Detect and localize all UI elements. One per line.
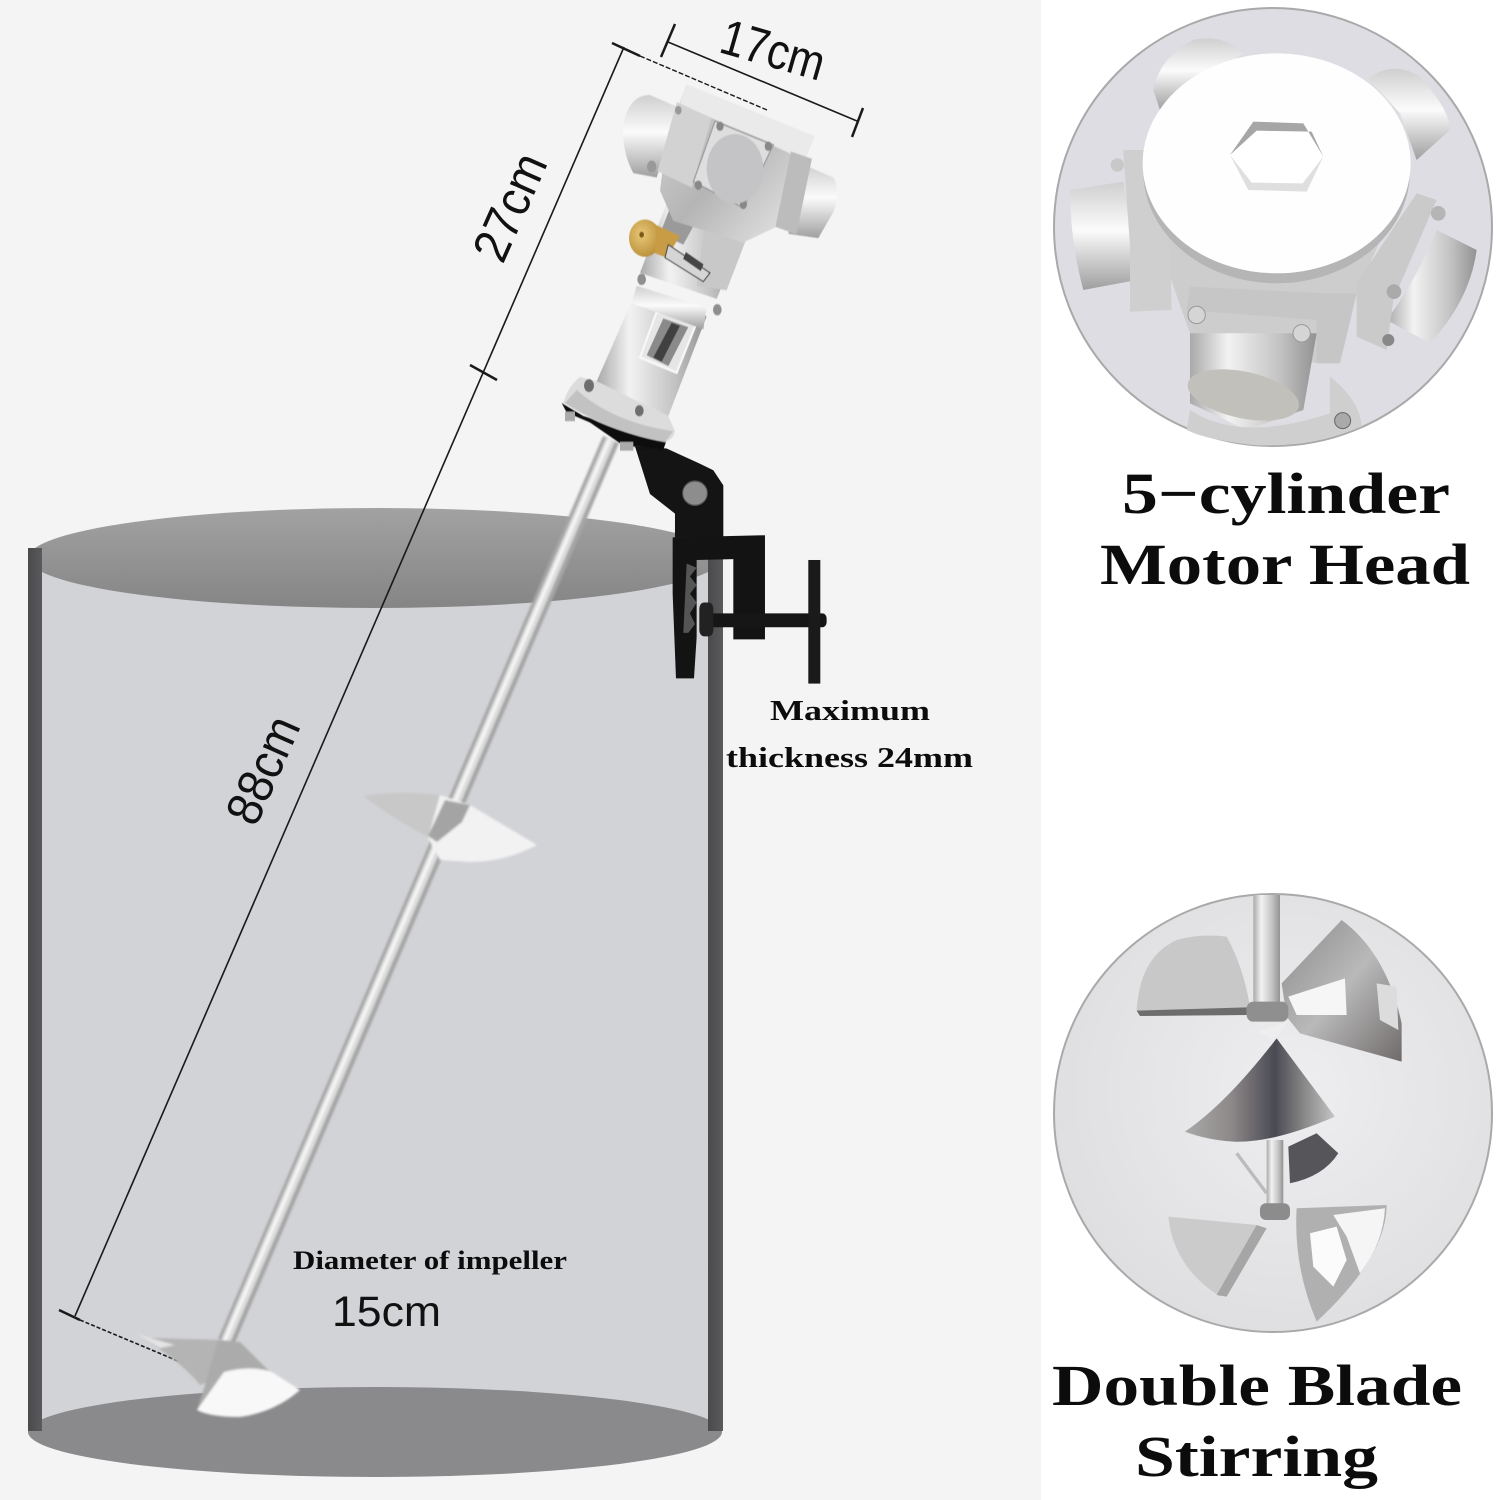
hub (1247, 1002, 1288, 1022)
central body (1143, 173, 1410, 363)
small dark blade (1288, 1133, 1338, 1183)
barrel container (28, 508, 723, 1477)
label: 27cm: 27cm (462, 144, 558, 270)
right cylinder (788, 164, 837, 238)
barrel left wall (28, 548, 42, 1431)
top-left cylinder (1153, 38, 1243, 110)
barrel top opening (28, 508, 722, 608)
lower tube (597, 290, 707, 416)
clamp bracket (635, 446, 827, 684)
dimension line: height 27cm and 88cm (59, 43, 640, 1366)
bracket arm (635, 446, 723, 537)
bottom cylinder (1190, 333, 1317, 430)
upper left blade (1137, 936, 1250, 1016)
clamp teeth (683, 563, 697, 633)
heading: double blade stirring (1052, 1353, 1462, 1489)
top plate (680, 84, 815, 160)
chrome air fitting (665, 245, 710, 282)
middle blade (1185, 1038, 1335, 1142)
heading: double blade stirring: Double Blade (1052, 1353, 1462, 1418)
dimension line: width 17cm (640, 24, 863, 137)
callout: maximum thickness: thickness 24mm (726, 743, 973, 774)
barrel bottom (28, 1387, 722, 1477)
black gasket (562, 403, 667, 450)
body shoulder (660, 84, 800, 243)
T handle (808, 560, 820, 684)
bottom impeller (135, 1333, 300, 1417)
bolt head (683, 481, 707, 505)
upper right blade (1282, 920, 1402, 1062)
sight window (640, 312, 697, 373)
callout: diameter of impeller: 15cm (332, 1288, 441, 1336)
lower left blade (1168, 1217, 1257, 1297)
front cylinder cap (707, 134, 763, 203)
lower right blade (1296, 1205, 1387, 1322)
neck recess (660, 199, 703, 245)
heading: 5-cylinder motor head: 5−cylinder (1122, 461, 1450, 526)
circle background (1054, 894, 1492, 1332)
panel: 5-cylinder motor head detail (1054, 8, 1492, 446)
heading: 5-cylinder motor head (1100, 461, 1470, 597)
front cylinder plate (693, 121, 773, 208)
callout: maximum thickness (726, 696, 973, 774)
barrel body (34, 552, 716, 1432)
top-right cylinder (1368, 69, 1450, 160)
callout: maximum thickness: Maximum (770, 696, 930, 727)
label: 17cm: 17cm (714, 8, 832, 92)
callout: diameter of impeller (293, 1246, 567, 1336)
lower hub (1260, 1203, 1290, 1220)
lower bolts (565, 412, 575, 421)
middle impeller (363, 793, 537, 862)
callout: diameter of impeller: Diameter of impeller (293, 1246, 567, 1275)
neck (640, 203, 740, 299)
base flange (563, 377, 675, 442)
barrel right wall (708, 556, 723, 1431)
circular top plate (1143, 53, 1411, 273)
right cylinder (1387, 230, 1477, 343)
panel: double blade stirring detail (1054, 894, 1492, 1332)
stirring shaft (218, 436, 619, 1345)
shaft (1253, 895, 1280, 1008)
motor head (562, 84, 837, 451)
circle background (1054, 8, 1492, 446)
band collar (632, 286, 707, 329)
clamp screw (700, 613, 827, 627)
heading: double blade stirring: Stirring (1135, 1424, 1378, 1489)
brass air valve (629, 220, 661, 257)
lower body (1187, 377, 1362, 445)
hexagon socket (1230, 122, 1323, 192)
left cylinder (1070, 182, 1137, 290)
label: 88cm: 88cm (215, 707, 311, 833)
clamp frame (673, 535, 765, 678)
heading: 5-cylinder motor head: Motor Head (1100, 532, 1470, 597)
left cylinder (623, 95, 680, 177)
circular top plate side (1143, 60, 1410, 283)
